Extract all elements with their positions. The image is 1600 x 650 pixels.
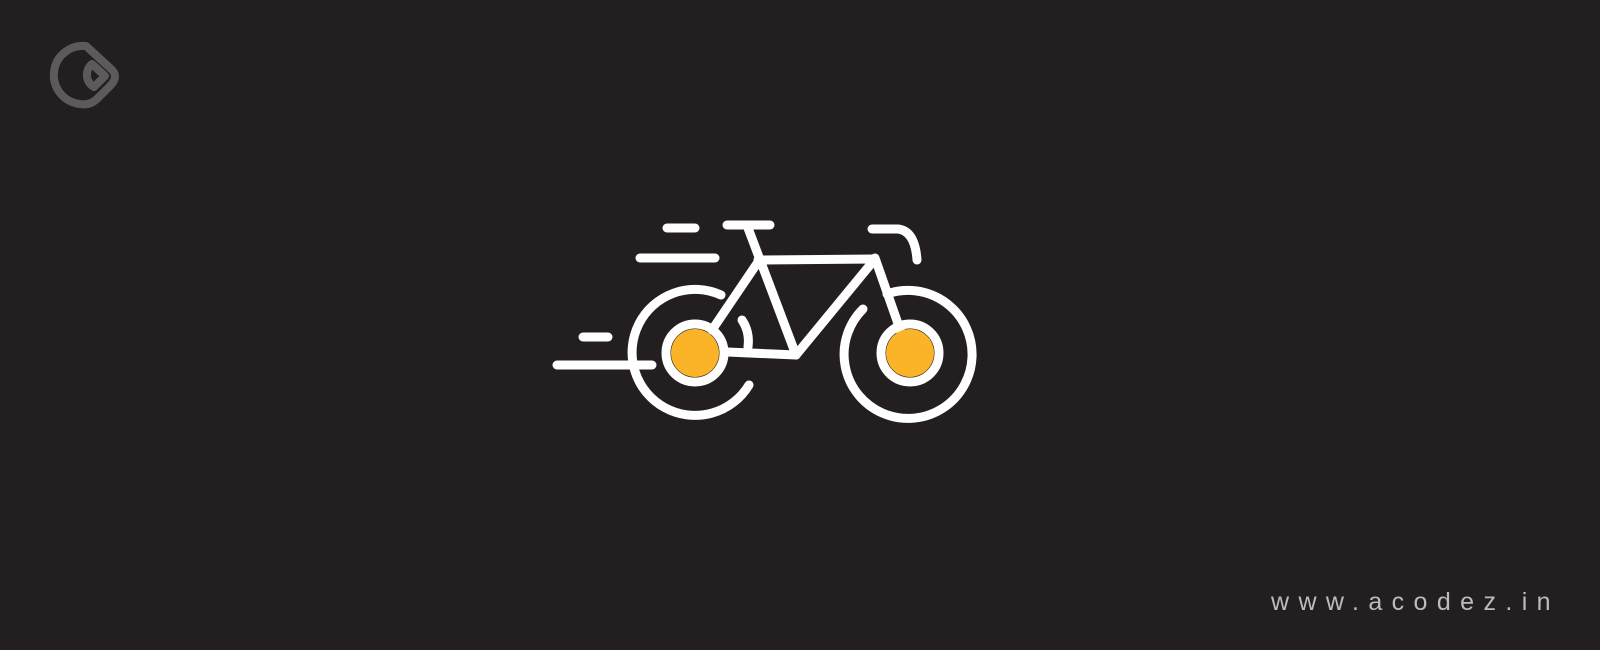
frame [712,225,917,355]
website url: www.acodez.in [1271,588,1560,616]
bicycle illustration [552,220,977,423]
front wheel [844,290,972,418]
speed lines [557,228,715,365]
hubs [671,329,934,377]
rear wheel [632,289,749,415]
logo mark [50,42,119,108]
